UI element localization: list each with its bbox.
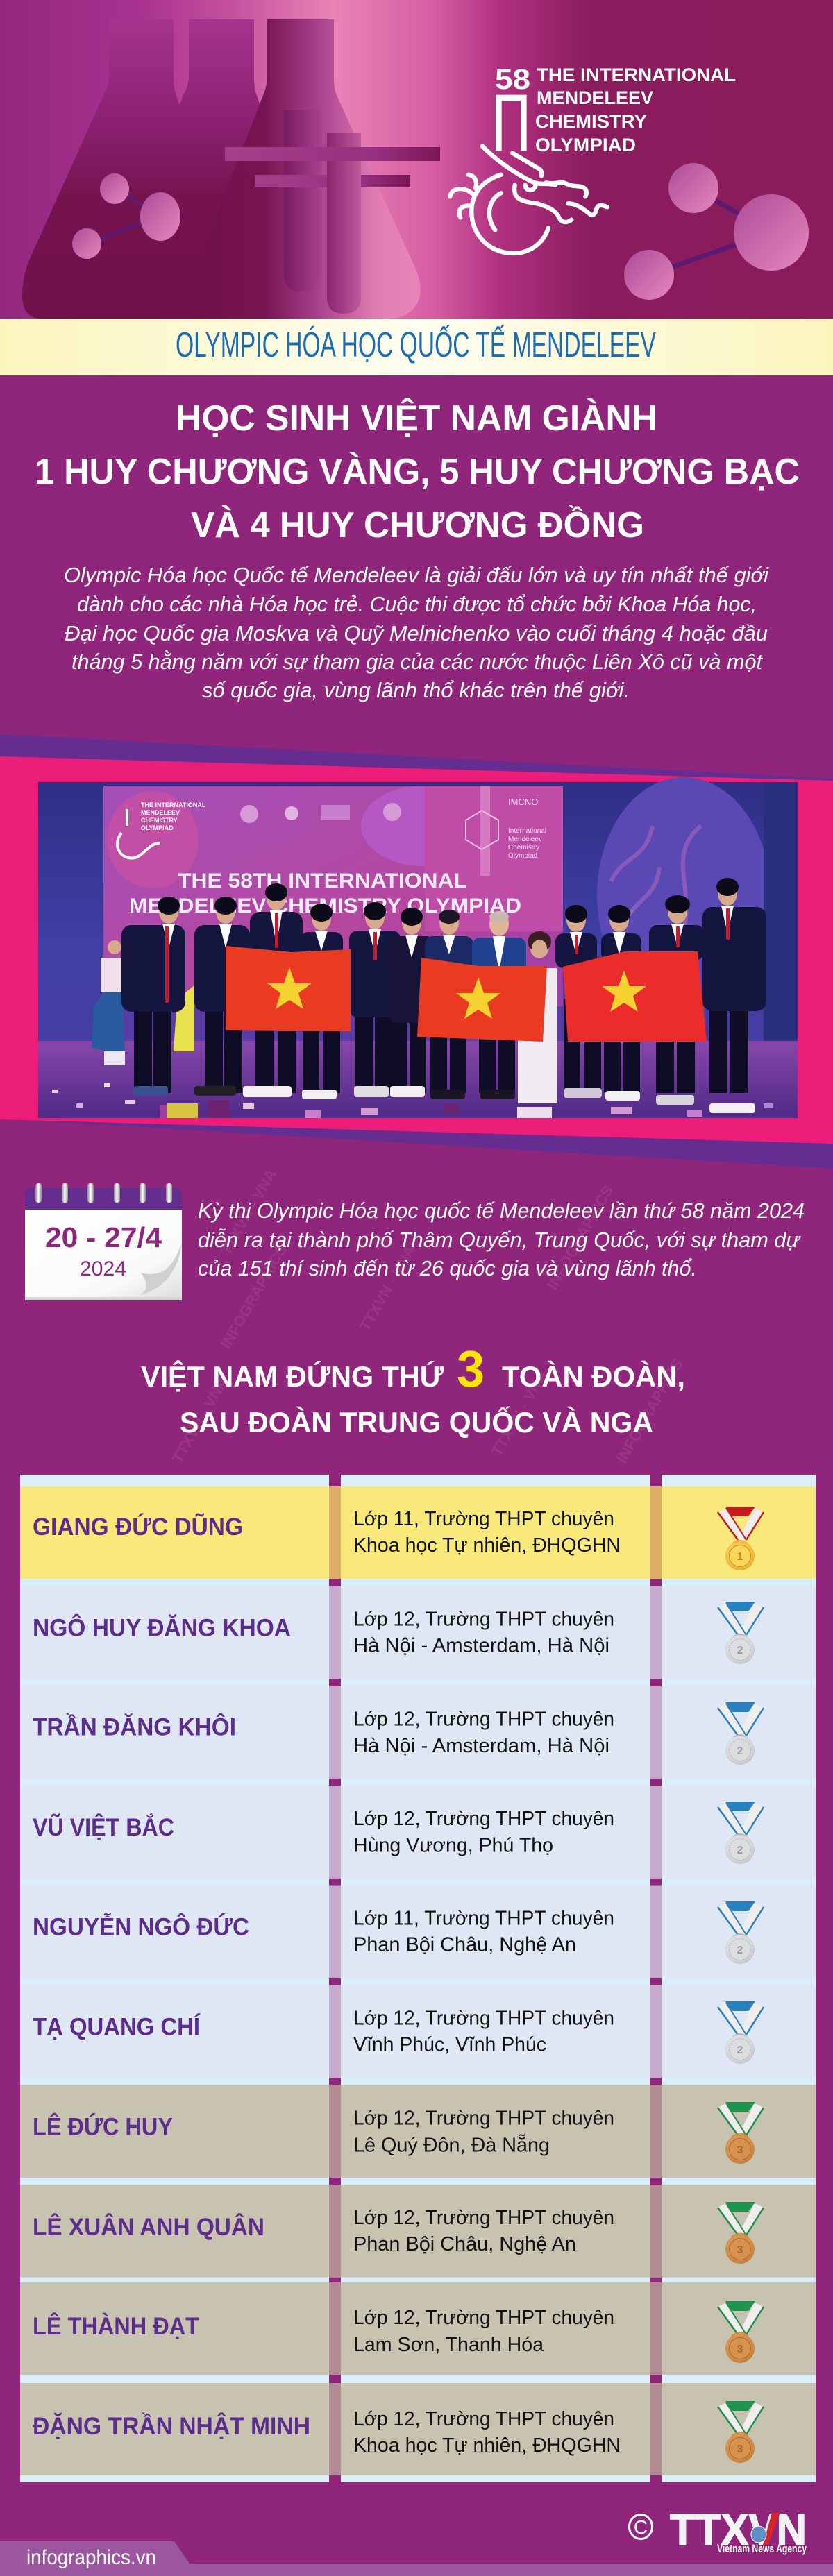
row: Lê Thành Đạt: Lớp 12, Trường THPT chuyên xyxy=(353,2307,614,2329)
olympiad logo: THE INTERNATIONAL xyxy=(537,65,736,85)
event description: của 151 thí sinh đến từ 26 quốc gia và vùng lãnh thổ. xyxy=(198,1256,697,1280)
main title: VÀ 4 HUY CHƯƠNG ĐỒNG xyxy=(191,505,644,545)
olympiad logo: CHEMISTRY xyxy=(535,111,647,132)
ranking heading: TOÀN ĐOÀN, xyxy=(502,1360,685,1393)
olympiad logo xyxy=(450,63,736,253)
row: Vũ Việt Bắc: Hùng Vương, Phú Thọ xyxy=(353,1834,553,1856)
row: Trần Đăng Khôi: TRẦN ĐĂNG KHÔI xyxy=(33,1713,236,1741)
main title: 1 HUY CHƯƠNG VÀNG, 5 HUY CHƯƠNG BẠC xyxy=(35,452,800,492)
row: Lê Xuân Anh Quân xyxy=(20,2185,816,2278)
row: Lê Đức Huy: Lê Quý Đôn, Đà Nẵng xyxy=(353,2134,550,2157)
intro paragraph: tháng 5 hằng năm với sự tham gia của các nước thuộc Liên Xô cũ và một xyxy=(71,650,763,674)
row: Đặng Trần Nhật Minh: Lớp 12, Trường THPT chuyên xyxy=(353,2408,614,2430)
projection screen: CHEMISTRY xyxy=(141,817,178,824)
flask 3 xyxy=(191,19,421,319)
team photo xyxy=(38,777,798,1118)
row: Tạ Quang Chí xyxy=(20,1985,816,2078)
row: Nguyễn Ngô Đức xyxy=(20,1886,816,1978)
projection screen: OLYMPIAD xyxy=(141,824,174,831)
watermarks: TTXVN - VNA xyxy=(217,1166,280,1257)
main title: HỌC SINH VIỆT NAM GIÀNH xyxy=(176,398,657,439)
row: Lê Đức Huy: Lớp 12, Trường THPT chuyên xyxy=(353,2108,614,2130)
row: Lê Đức Huy: LÊ ĐỨC HUY xyxy=(33,2113,173,2141)
row: Đặng Trần Nhật Minh xyxy=(20,2383,816,2475)
row: Vũ Việt Bắc: Lớp 12, Trường THPT chuyên xyxy=(353,1808,614,1830)
stage floor xyxy=(38,1006,798,1118)
footer site tab: infographics.vn xyxy=(26,2546,156,2569)
row: Lê Xuân Anh Quân: Lớp 12, Trường THPT chuyên xyxy=(353,2207,614,2229)
row: Lê Xuân Anh Quân: 3 xyxy=(737,2244,743,2256)
row: Trần Đăng Khôi: 2 xyxy=(737,1745,743,1757)
row: Ngô Huy Đăng Khoa: NGÔ HUY ĐĂNG KHOA xyxy=(33,1613,291,1641)
olympiad logo: MENDELEEV xyxy=(537,87,653,108)
watermarks: TTXVN - VNA xyxy=(488,1367,550,1459)
intro paragraph: số quốc gia, vùng lãnh thổ khác trên thế giới. xyxy=(202,678,630,702)
row: Nguyễn Ngô Đức: Lớp 11, Trường THPT chuyên xyxy=(353,1907,614,1929)
row: Vũ Việt Bắc xyxy=(20,1786,816,1879)
calendar icon xyxy=(25,1183,182,1300)
row: Giang Đức Dũng: 1 xyxy=(737,1551,743,1563)
row: Đặng Trần Nhật Minh: Khoa học Tự nhiên, ĐHQGHN xyxy=(353,2434,621,2457)
main title xyxy=(35,398,800,545)
row: Ngô Huy Đăng Khoa xyxy=(20,1586,816,1679)
calendar icon: 2024 xyxy=(80,1257,126,1280)
row: Trần Đăng Khôi: Hà Nội - Amsterdam, Hà Nội xyxy=(353,1735,609,1757)
projection screen: MENDELEEV CHEMISTRY OLYMPIAD xyxy=(129,895,521,917)
agency logo: C xyxy=(634,2516,648,2538)
event description xyxy=(198,1198,805,1280)
row: Đặng Trần Nhật Minh: ĐẶNG TRẦN NHẬT MINH xyxy=(33,2412,310,2440)
yellow subtitle band xyxy=(0,319,833,375)
flask 1 xyxy=(22,19,250,319)
ranking heading: 3 xyxy=(457,1340,485,1398)
watermarks: INFOGRAPHICS xyxy=(544,1183,617,1292)
projection screen: THE 58TH INTERNATIONAL xyxy=(178,870,467,892)
row: Tạ Quang Chí: Lớp 12, Trường THPT chuyên xyxy=(353,2007,614,2029)
row: Nguyễn Ngô Đức: Phan Bội Châu, Nghệ An xyxy=(353,1934,576,1956)
footer site tab xyxy=(0,2541,833,2576)
row: Giang Đức Dũng: GIANG ĐỨC DŨNG xyxy=(33,1513,243,1541)
agency logo: TTXVN xyxy=(670,2505,807,2554)
projection screen xyxy=(103,786,563,1008)
watermarks: INFOGRAPHICS xyxy=(217,1242,291,1352)
projection screen: MENDELEEV xyxy=(141,809,180,816)
projection screen: Mendeleev xyxy=(508,836,542,843)
row: Lê Đức Huy: 3 xyxy=(737,2144,743,2156)
ranking heading: SAU ĐOÀN TRUNG QUỐC VÀ NGA xyxy=(180,1405,653,1439)
header banner xyxy=(0,0,833,319)
projection screen: International xyxy=(508,827,546,835)
row: Tạ Quang Chí: TẠ QUANG CHÍ xyxy=(33,2013,201,2041)
row: Giang Đức Dũng: Lớp 11, Trường THPT chuyên xyxy=(353,1508,614,1530)
medal table xyxy=(20,1475,816,2482)
projection screen: Olympiad xyxy=(508,852,537,860)
row: Lê Đức Huy xyxy=(20,2085,816,2178)
intro paragraph: Đại học Quốc gia Moskva và Quỹ Melnichenko vào cuối tháng 4 hoặc đầu xyxy=(65,621,768,645)
flask 2 xyxy=(109,19,333,319)
row: Ngô Huy Đăng Khoa: Lớp 12, Trường THPT chuyên xyxy=(353,1608,614,1630)
row: Ngô Huy Đăng Khoa: Hà Nội - Amsterdam, Hà Nội xyxy=(353,1635,609,1657)
person in background with banner xyxy=(92,940,194,1065)
row: Vũ Việt Bắc: VŨ VIỆT BẮC xyxy=(33,1813,174,1841)
molecule left xyxy=(72,173,180,259)
stage curtain with dragon motif xyxy=(597,777,798,1118)
row: Nguyễn Ngô Đức: NGUYỄN NGÔ ĐỨC xyxy=(33,1913,249,1941)
row: Trần Đăng Khôi: Lớp 12, Trường THPT chuyên xyxy=(353,1709,614,1731)
projection screen: Chemistry xyxy=(508,844,539,851)
watermarks: TTXVN - VNA xyxy=(356,1242,419,1334)
row: Tạ Quang Chí: 2 xyxy=(737,2044,743,2056)
row: Tạ Quang Chí: Vĩnh Phúc, Vĩnh Phúc xyxy=(353,2034,546,2056)
calendar icon: 20 - 27/4 xyxy=(45,1221,162,1253)
intro paragraph xyxy=(64,563,769,702)
watermarks: TTXVN - VNA xyxy=(169,1374,231,1466)
row: Đặng Trần Nhật Minh: 3 xyxy=(737,2443,743,2455)
intro paragraph: dành cho các nhà Hóa học trẻ. Cuộc thi được tổ chức bởi Khoa Hóa học, xyxy=(77,592,757,616)
row: Lê Thành Đạt: LÊ THÀNH ĐẠT xyxy=(33,2312,199,2340)
photo frame ribbon xyxy=(0,734,833,1169)
row: Vũ Việt Bắc: 2 xyxy=(737,1845,743,1856)
row: Giang Đức Dũng xyxy=(20,1486,816,1579)
ranking heading: VIỆT NAM ĐỨNG THỨ xyxy=(141,1359,444,1393)
projection screen: THE INTERNATIONAL xyxy=(141,802,206,808)
row: Lê Thành Đạt: 3 xyxy=(737,2344,743,2355)
olympiad logo: OLYMPIAD xyxy=(535,135,636,155)
event description: Kỳ thi Olympic Hóa học quốc tế Mendeleev lần thứ 58 năm 2024 xyxy=(198,1198,805,1223)
row: Ngô Huy Đăng Khoa: 2 xyxy=(737,1645,743,1656)
row: Lê Thành Đạt xyxy=(20,2282,816,2375)
ranking heading xyxy=(141,1340,685,1439)
olympiad logo: 58 xyxy=(495,63,530,95)
row: Trần Đăng Khôi xyxy=(20,1686,816,1779)
test tubes xyxy=(225,110,440,314)
watermarks xyxy=(169,1166,687,1466)
event description: diễn ra tại thành phố Thâm Quyến, Trung Quốc, với sự tham dự xyxy=(198,1228,801,1252)
watermarks: INFOGRAPHICS xyxy=(613,1356,687,1466)
group of students and teachers xyxy=(121,878,766,1113)
row: Lê Xuân Anh Quân: LÊ XUÂN ANH QUÂN xyxy=(33,2213,264,2241)
intro paragraph: Olympic Hóa học Quốc tế Mendeleev là giải đấu lớn và uy tín nhất thế giới xyxy=(64,563,769,587)
projection screen: IMCNO xyxy=(508,797,538,807)
molecule right xyxy=(624,163,809,300)
Vietnamese flags xyxy=(226,946,707,1042)
row: Giang Đức Dũng: Khoa học Tự nhiên, ĐHQGHN xyxy=(353,1534,621,1557)
row: Nguyễn Ngô Đức: 2 xyxy=(737,1944,743,1956)
row: Lê Thành Đạt: Lam Sơn, Thanh Hóa xyxy=(353,2334,544,2356)
row: Lê Xuân Anh Quân: Phan Bội Châu, Nghệ An xyxy=(353,2233,576,2255)
